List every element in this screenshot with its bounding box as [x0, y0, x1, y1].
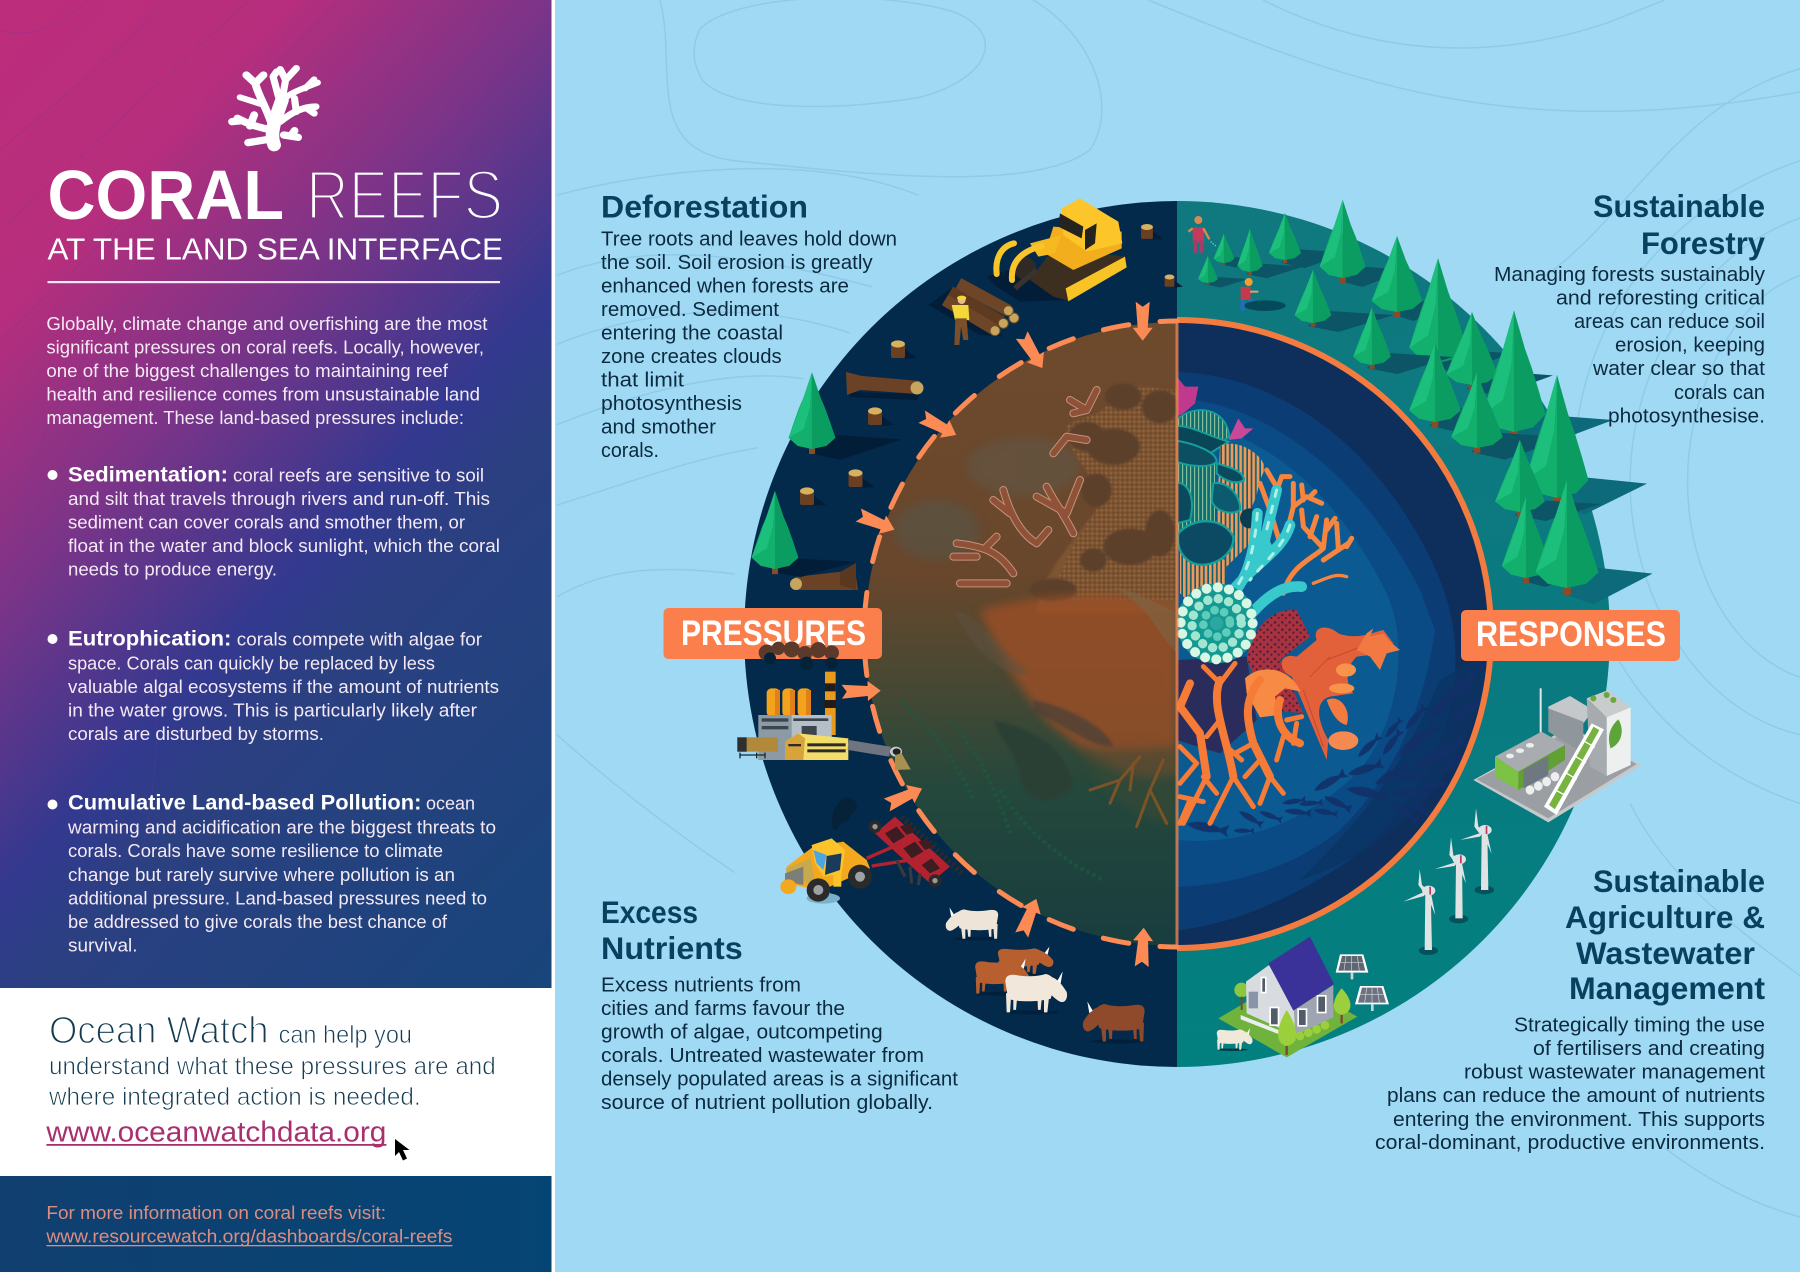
panel: ocean watch callout: can help you: [279, 1021, 412, 1049]
text: deforestation: photosynthesis: [601, 393, 742, 415]
icon: house with solar panels: [1217, 937, 1389, 1057]
text: deforestation: Deforestation: [601, 189, 808, 225]
icon: tractor and plough: [780, 797, 962, 904]
text: deforestation: Tree roots and leaves hold down: [601, 229, 897, 251]
label: responses: RESPONSES: [1476, 615, 1666, 654]
icon: cows: [946, 907, 1145, 1044]
icon: white coral: [232, 68, 318, 145]
text: sustainable forestry: areas can reduce soil: [1574, 311, 1765, 333]
text: deforestation: the soil. Soil erosion is greatly: [601, 252, 873, 274]
text: excess nutrients: Excess nutrients from: [601, 975, 801, 997]
icon: tree planters: [1188, 216, 1286, 311]
text: sustainable agriculture and wastewater: entering the environment. This supports: [1393, 1109, 1765, 1131]
coral: orange fans: [1260, 470, 1352, 593]
text: sustainable agriculture and wastewater: Strategically timing the use: [1514, 1015, 1765, 1037]
text: sedimentation: Sedimentation:: [68, 462, 228, 486]
text: sedimentation: coral reefs are sensitive to soil: [233, 464, 484, 485]
text: eutrophication: Eutrophication:: [68, 627, 231, 651]
text: sustainable agriculture and wastewater: robust wastewater management: [1464, 1062, 1765, 1084]
text: eutrophication: corals compete with algae for: [237, 629, 482, 650]
text: deforestation: corals.: [601, 440, 659, 462]
text: excess nutrients: Nutrients: [601, 930, 743, 966]
icon: factory smoke: [759, 641, 839, 670]
icon: green building: [1473, 688, 1642, 822]
link: ocean watch: www.oceanwatchdata.org: [45, 1117, 386, 1149]
contour lines: ocean background: [557, 0, 1800, 1217]
text: sustainable agriculture and wastewater: Sustainable: [1593, 863, 1765, 899]
title: REEFS: [306, 156, 503, 234]
text: sustainable agriculture and wastewater: of fertilisers and creating: [1533, 1038, 1765, 1060]
text: cumulative pollution: ocean: [426, 792, 475, 814]
inner: degraded reef: [860, 320, 1180, 950]
text: sedimentation: sediment can cover corals and smother them, or: [68, 511, 465, 532]
text: excess nutrients: Excess: [601, 894, 698, 930]
text: excess nutrients: [601, 894, 958, 1114]
text: deforestation: and smother: [601, 417, 716, 439]
arrows: pressures: [841, 302, 1154, 967]
text: deforestation: entering the coastal: [601, 323, 783, 345]
text: introduction: health and resilience comes from unsustainable land: [46, 384, 480, 404]
text: deforestation: enhanced when forests are: [601, 276, 849, 298]
text: cumulative pollution: change but rarely survive where pollution is an: [68, 864, 455, 885]
text: sedimentation: and silt that travels through rivers and run-off. This: [68, 488, 490, 509]
text: sustainable agriculture and wastewater: [1375, 863, 1766, 1154]
text: excess nutrients: densely populated areas is a significant: [601, 1069, 958, 1091]
coral: turquoise branches: [1227, 490, 1302, 612]
icon: logs and worker: [928, 283, 1019, 345]
icon: fallen logs: [790, 372, 924, 590]
text: sustainable forestry: photosynthesise.: [1608, 406, 1765, 428]
center divider: [1176, 320, 1178, 948]
diagram: circle: [737, 198, 1652, 1067]
half circle: responses land: [1177, 201, 1610, 1067]
text: sustainable agriculture and wastewater: Wastewater: [1576, 935, 1755, 971]
text: sedimentation: [48, 462, 500, 579]
text: sustainable forestry: Sustainable: [1593, 188, 1765, 224]
text: sustainable forestry: water clear so that: [1592, 358, 1765, 380]
label: pressures: PRESSURES: [681, 614, 866, 653]
text: sustainable forestry: corals can: [1674, 382, 1765, 404]
text: sedimentation: float in the water and block sunlight, which the coral: [68, 535, 500, 556]
panel: ocean watch callout: Ocean Watch: [49, 1010, 269, 1052]
text: cumulative pollution: be addressed to give corals the best chance of: [68, 911, 448, 932]
text: sustainable agriculture and wastewater: Agriculture &: [1565, 899, 1765, 935]
text: excess nutrients: corals. Untreated wastewater from: [601, 1045, 924, 1067]
panel: ocean watch callout: understand what these pressures are and: [49, 1052, 496, 1080]
text: introduction: significant pressures on coral reefs. Locally, however,: [46, 336, 484, 358]
label: responses: [1461, 610, 1680, 661]
inner: healthy reef: [1175, 320, 1495, 950]
text: eutrophication: corals are disturbed by storms.: [68, 723, 324, 744]
label: pressures: [664, 608, 882, 659]
coral: red and orange cluster: [1177, 610, 1400, 823]
text: sedimentation: needs to produce energy.: [68, 558, 277, 579]
sponges: [1177, 377, 1265, 603]
text: sustainable forestry: and reforesting critical: [1556, 288, 1765, 310]
text: cumulative pollution: corals. Corals have some resilience to climate: [68, 840, 443, 861]
ring: pressures dashed line: [864, 321, 1177, 947]
panel: ocean watch callout: [0, 988, 552, 1176]
text: eutrophication: [48, 627, 499, 744]
icon: cut trees: [752, 372, 902, 577]
panel: footer: [0, 1176, 552, 1272]
text: excess nutrients: source of nutrient pollution globally.: [601, 1092, 933, 1114]
text: sustainable forestry: Forestry: [1641, 225, 1765, 261]
text: sustainable agriculture and wastewater: plans can reduce the amount of nutrients: [1387, 1085, 1765, 1107]
text: cumulative pollution: additional pressure. Land-based pressures need to: [68, 888, 487, 908]
icon: wind turbines: [1403, 808, 1494, 955]
text: eutrophication: space. Corals can quickly be replaced by less: [68, 652, 435, 673]
icon: bulldozer: [987, 198, 1127, 302]
text: cumulative pollution: [48, 790, 496, 956]
title: CORAL: [48, 156, 284, 234]
panel: ocean watch callout: where integrated action is needed.: [48, 1083, 421, 1111]
text: cumulative pollution: Cumulative Land-based Pollution:: [68, 790, 421, 814]
trees: sustainable forestry: [1198, 200, 1652, 604]
text: excess nutrients: cities and farms favour the: [601, 998, 845, 1020]
text: introduction: [46, 313, 488, 428]
text: deforestation: that limit: [601, 370, 684, 392]
text: introduction: management. These land-based pressures include:: [46, 407, 464, 428]
text: deforestation: [601, 189, 897, 462]
icon: cursor: [395, 1139, 410, 1160]
title: [48, 156, 503, 234]
text: eutrophication: in the water grows. This is particularly likely after: [68, 699, 477, 720]
text: cumulative pollution: survival.: [68, 935, 138, 956]
half circle: pressures land: [744, 201, 1177, 1067]
panel: footer: www.resourcewatch.org/dashboards/coral-reefs: [45, 1226, 452, 1247]
text: sustainable agriculture and wastewater: Management: [1569, 970, 1766, 1006]
text: eutrophication: valuable algal ecosystems if the amount of nutrients: [68, 676, 499, 697]
text: deforestation: removed. Sediment: [601, 299, 779, 321]
text: sustainable agriculture and wastewater: coral-dominant, productive environments.: [1375, 1132, 1765, 1154]
fish school: [1187, 696, 1482, 837]
text: deforestation: zone creates clouds: [601, 346, 782, 368]
text: sustainable forestry: Managing forests sustainably: [1494, 264, 1765, 286]
icon: stumps: [800, 224, 1183, 506]
coral: anemone: [1177, 583, 1257, 663]
ring: responses solid line: [1177, 320, 1491, 948]
text: introduction: one of the biggest challenges to maintaining reef: [46, 360, 449, 381]
panel: footer: For more information on coral reefs visit:: [46, 1202, 386, 1223]
text: excess nutrients: growth of algae, outcompeting: [601, 1022, 883, 1044]
text: sustainable forestry: [1494, 188, 1765, 428]
text: introduction: Globally, climate change and overfishing are the most: [46, 313, 488, 334]
text: sustainable forestry: erosion, keeping: [1615, 335, 1765, 357]
text: cumulative pollution: warming and acidification are the biggest threats to: [67, 816, 496, 838]
subtitle: AT THE LAND SEA INTERFACE: [48, 232, 503, 266]
panel: sidebar: [0, 0, 552, 988]
icon: factory: [737, 672, 911, 770]
